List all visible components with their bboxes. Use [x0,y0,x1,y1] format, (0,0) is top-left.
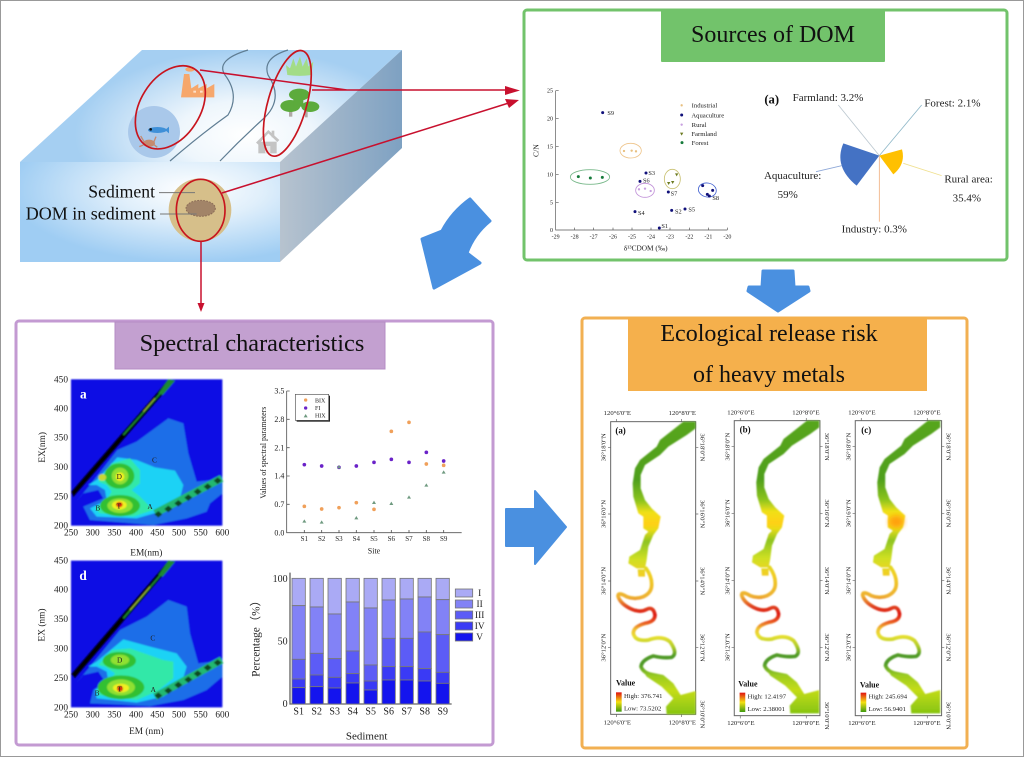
scatter chart: spectral parameters by site: 2.8 [274,415,284,424]
contour plot a: 200 [54,522,68,532]
scatter chart: C/N vs carbon isotope [531,89,731,253]
scatter chart: spectral parameters by site [259,387,462,556]
scatter chart: C/N vs carbon isotope: S1 [661,223,668,230]
contour plot d: 600 [215,711,230,721]
stacked bar chart: percentage by sediment: 100 [273,574,288,585]
pie chart: DOM source shares: Forest: 2.1% [924,97,980,109]
map c [845,410,952,730]
map c: 36°16'0"N [945,499,952,528]
scatter chart: C/N vs carbon isotope: 15 [547,144,553,150]
scatter chart: spectral parameters by site: 3.5 [274,387,284,396]
map a: 120°8'0"E [669,410,696,417]
3D block diagram [20,45,402,262]
map b: 36°14'0"N [823,567,830,595]
arrow: sources to DOM panel [200,70,520,95]
DOM in sediment blob [186,200,215,216]
contour plot a: 350 [54,434,68,444]
scatter chart: spectral parameters by site: S5 [370,535,378,543]
scatter chart: C/N vs carbon isotope: -26 [609,234,617,240]
arrow: sediment to spectral panel [198,241,204,312]
map c: 36°14'0"N [945,567,952,595]
scatter chart: spectral parameters by site: 1.4 [274,472,284,481]
pie chart: DOM source shares: Aquaculture: [764,170,821,182]
heading: ecological release risk: Ecological release risk [660,321,878,347]
red ellipse: sediment [176,179,225,241]
map b: 120°6'0"E [727,720,755,727]
scatter chart: C/N vs carbon isotope: S5 [688,207,695,214]
map b: 36°18'0"N [823,433,830,461]
contour plot d: 400 [129,711,143,721]
scatter chart: C/N vs carbon isotope: -27 [590,234,598,240]
stacked bar chart: percentage by sediment: S1 [293,706,304,717]
contour plot a: 350 [107,529,122,539]
contour plot d: C [150,634,155,643]
scatter chart: C/N vs carbon isotope: 5 [550,200,553,206]
red arrows from block [198,70,520,312]
heading: ecological release risk: of heavy metals [693,362,845,388]
map b: Low: 2.38001 [748,706,785,713]
panel: spectral characteristics [16,321,493,745]
contour plot d: 350 [107,711,122,721]
map c: High: 245.694 [869,693,908,700]
scatter chart: spectral parameters by site: S7 [405,535,413,543]
pie chart: DOM source shares: Industry: 0.3% [842,223,907,235]
block top face [20,50,402,162]
contour plot a: 450 [150,529,165,539]
heading: ecological release risk [628,317,927,391]
map b: 36°16'0"N [823,499,830,528]
icon: trees [280,89,319,117]
contour plot d: 550 [194,711,208,721]
map a: 36°14'0"N [601,567,608,595]
map c: 120°8'0"E [913,720,941,727]
map b: 36°16'0"N [724,499,731,527]
scatter chart: C/N vs carbon isotope: S2 [675,208,682,215]
scatter chart: C/N vs carbon isotope: S8 [712,195,719,202]
map a: 36°16'0"N [699,500,706,528]
scatter chart: spectral parameters by site: FI [315,406,320,412]
contour plot d: 300 [86,711,100,721]
map b: 120°8'0"E [792,720,820,727]
map b: 36°12'0"N [724,633,731,661]
panel: ecological release risk [582,317,967,748]
stacked bar chart: percentage by sediment: Sediment [346,731,387,743]
map a: 120°6'0"E [604,719,631,726]
contour plot a: 250 [64,529,78,539]
map b: Value [738,679,758,688]
stacked bar chart: percentage by sediment: IV [475,622,485,632]
contour plot d: 450 [150,711,165,721]
stacked bar chart: percentage by sediment: Percentage（%） [250,595,263,677]
heading: sources of DOM: Sources of DOM [691,22,855,48]
contour plot d: 400 [54,586,68,596]
pie chart: DOM source shares: 35.4% [953,193,981,205]
scatter chart: spectral parameters by site: BIX [315,398,326,404]
stacked bar chart: percentage by sediment: S4 [347,706,358,717]
scatter chart: C/N vs carbon isotope: -24 [647,234,655,240]
scatter chart: C/N vs carbon isotope: Industrial [692,103,717,110]
block front face [20,162,280,262]
scatter chart: C/N vs carbon isotope: 25 [547,89,553,95]
scatter chart: C/N vs carbon isotope: S4 [638,210,646,217]
map c: Value [860,680,880,689]
stacked bar chart: percentage by sediment: I [478,589,481,599]
scatter chart: C/N vs carbon isotope: Forest [692,140,708,147]
scatter chart: C/N vs carbon isotope: -23 [666,234,674,240]
red ellipse: land sources [254,45,321,161]
map c: 36°10'0"N [945,702,952,730]
icon: aquaculture pond with fish and crab [128,106,180,158]
stacked bar chart: percentage by sediment: S5 [365,706,376,717]
stacked bar chart: percentage by sediment [250,573,485,743]
contour plot d: d [79,568,87,583]
contour plot d: 250 [54,674,68,684]
stacked bar chart: percentage by sediment: S8 [419,706,430,717]
scatter chart: spectral parameters by site: S3 [335,535,343,543]
map b: 36°18'0"N [724,432,731,461]
contour plot a: EX(nm) [37,432,48,463]
map c: 120°8'0"E [913,410,941,417]
stacked bar chart: percentage by sediment: 50 [278,637,288,648]
contour plot d: D [117,656,122,665]
stacked bar chart: percentage by sediment: S3 [329,706,340,717]
contour plot d: 200 [54,703,68,713]
map b: 36°14'0"N [724,566,731,595]
stacked bar chart: percentage by sediment: S6 [383,706,394,717]
map a: (a) [615,425,626,435]
scatter chart: C/N vs carbon isotope: 0 [550,228,553,234]
scatter chart: spectral parameters by site: HIX [315,414,326,420]
scatter chart: C/N vs carbon isotope: -28 [571,234,579,240]
red ellipse: factory and aquaculture [121,53,220,162]
map c: 36°14'0"N [845,566,852,595]
scatter chart: C/N vs carbon isotope: Aquaculture [691,113,724,120]
contour plot a: B [95,504,100,513]
map a: High: 376.741 [624,693,662,700]
contour plot d: 450 [54,557,68,567]
map a: 36°14'0"N [699,567,706,595]
stacked bar chart: percentage by sediment: S7 [401,706,412,717]
scatter chart: C/N vs carbon isotope: -29 [552,234,560,240]
scatter chart: C/N vs carbon isotope: δ¹³CDOM (‰) [624,244,668,253]
pie chart: DOM source shares: Farmland: 3.2% [793,92,863,104]
contour plot a [37,375,230,558]
pie chart: DOM source shares [764,92,993,235]
contour plot a: C [152,456,157,465]
map c: Low: 56.9401 [869,706,906,713]
scatter chart: C/N vs carbon isotope: Farmland [691,131,718,138]
map a: 36°16'0"N [601,500,608,528]
contour plot a: A [147,502,153,511]
map a: 36°10'0"N [699,700,706,729]
scatter chart: spectral parameters by site: S4 [353,535,361,543]
scatter chart: C/N vs carbon isotope: S3 [648,170,655,177]
stacked bar chart: percentage by sediment: III [475,611,484,621]
heading: spectral characteristics [115,322,385,369]
block side face [280,50,402,262]
scatter chart: C/N vs carbon isotope: S9 [607,110,614,117]
scatter chart: spectral parameters by site: S6 [388,535,396,543]
map c: 120°6'0"E [848,720,876,727]
map c: 36°12'0"N [845,633,852,661]
contour plot a: 300 [86,529,100,539]
scatter chart: C/N vs carbon isotope: -22 [685,234,693,240]
contour plot d: 250 [64,711,78,721]
map b: 36°10'0"N [823,702,830,730]
scatter chart: spectral parameters by site: 0.0 [274,528,284,537]
stacked bar chart: percentage by sediment: V [476,633,483,643]
heading: sources of DOM [661,10,885,62]
contour plot d: EM (nm) [129,726,164,737]
blue arrow: down toward ecological panel [748,271,809,311]
sediment label: Sediment [88,181,155,201]
contour plot a: 400 [54,404,68,414]
heading: spectral characteristics: Spectral characteristics [140,330,364,357]
scatter chart: C/N vs carbon isotope: C/N [531,144,540,157]
contour plot d: 300 [54,645,68,655]
contour plot d: B [95,688,100,697]
contour plot d: 500 [172,711,186,721]
contour plot d [37,557,230,737]
contour plot a: 450 [54,375,68,385]
stacked bar chart: percentage by sediment: S2 [311,706,322,717]
map a: 36°12'0"N [601,633,608,662]
contour plot a: a [80,387,87,402]
sediment sample circle [169,178,231,242]
arrow: sediment to DOM panel [222,99,519,193]
map a: 36°18'0"N [699,433,706,462]
icon: factory [181,67,214,97]
map a: Value [616,679,636,688]
scatter chart: spectral parameters by site: 0.7 [274,500,284,509]
contour plot a: 500 [172,529,186,539]
stacked bar chart: percentage by sediment: 0 [283,699,288,710]
stacked bar chart: percentage by sediment: II [477,600,483,610]
contour plot a: 550 [194,529,208,539]
scatter chart: C/N vs carbon isotope: -21 [704,234,712,240]
contour plot a: 300 [54,463,68,473]
scatter chart: C/N vs carbon isotope: 20 [547,117,553,123]
map b: 36°12'0"N [823,633,830,662]
contour plot d: T [117,684,122,693]
contour plot a: 400 [129,529,143,539]
contour plot a: D [117,472,122,481]
map b: (b) [740,424,751,434]
scatter chart: C/N vs carbon isotope: S7 [671,190,677,197]
stacked bar chart: percentage by sediment: S9 [437,706,448,717]
map b: 120°6'0"E [727,410,755,417]
contour plot a: 250 [54,492,68,502]
contour plot d: EX (nm) [37,609,48,641]
map a: 36°18'0"N [601,433,608,461]
blue arrow: curved toward spectral panel [422,199,490,288]
scatter chart: spectral parameters by site: 2.1 [274,443,284,452]
contour plot d: A [151,685,157,694]
contour plot a: T [117,501,122,510]
scatter chart: C/N vs carbon isotope: -25 [628,234,636,240]
scatter chart: C/N vs carbon isotope: Rural [692,122,707,129]
contour plot a: EM(nm) [130,547,162,558]
map b [724,410,830,730]
pie chart: DOM source shares: Rural area: [944,174,993,186]
scatter chart: C/N vs carbon isotope: 10 [547,172,553,178]
map c: 120°6'0"E [848,410,876,417]
scatter chart: spectral parameters by site: Site [368,547,381,556]
scatter chart: spectral parameters by site: S2 [318,535,326,543]
scatter chart: spectral parameters by site: Values of spectral parameters [259,407,268,499]
river lines on surface [170,50,288,161]
map a: 36°12'0"N [699,634,706,662]
scatter chart: C/N vs carbon isotope: S6 [643,177,650,184]
map b: 120°8'0"E [792,410,820,417]
map a: Low: 73.5202 [624,706,661,713]
scatter chart: C/N vs carbon isotope: -20 [723,234,731,240]
scatter chart: spectral parameters by site: S8 [423,535,431,543]
pie chart: DOM source shares: (a) [764,92,779,106]
map a [601,410,706,729]
map a: 120°8'0"E [669,719,696,726]
label leader lines [159,193,197,214]
scatter chart: spectral parameters by site: S1 [301,535,309,543]
icon: grass [286,57,313,76]
map b: High: 12.4197 [748,693,787,700]
map c: 36°16'0"N [845,499,852,527]
blue arrow: right toward ecological panel [506,491,566,564]
panel: sources of DOM [524,10,1007,260]
map c: 36°18'0"N [945,433,952,461]
contour plot a: 600 [215,529,230,539]
DOM in sediment label: DOM in sediment [26,203,156,223]
icon: house [256,130,279,153]
map c: (c) [861,425,871,435]
map a: 120°6'0"E [604,410,631,417]
map c: 36°18'0"N [845,432,852,461]
map c: 36°12'0"N [945,633,952,662]
pie chart: DOM source shares: 59% [778,189,798,201]
contour plot d: 350 [54,615,68,625]
scatter chart: spectral parameters by site: S9 [440,535,448,543]
